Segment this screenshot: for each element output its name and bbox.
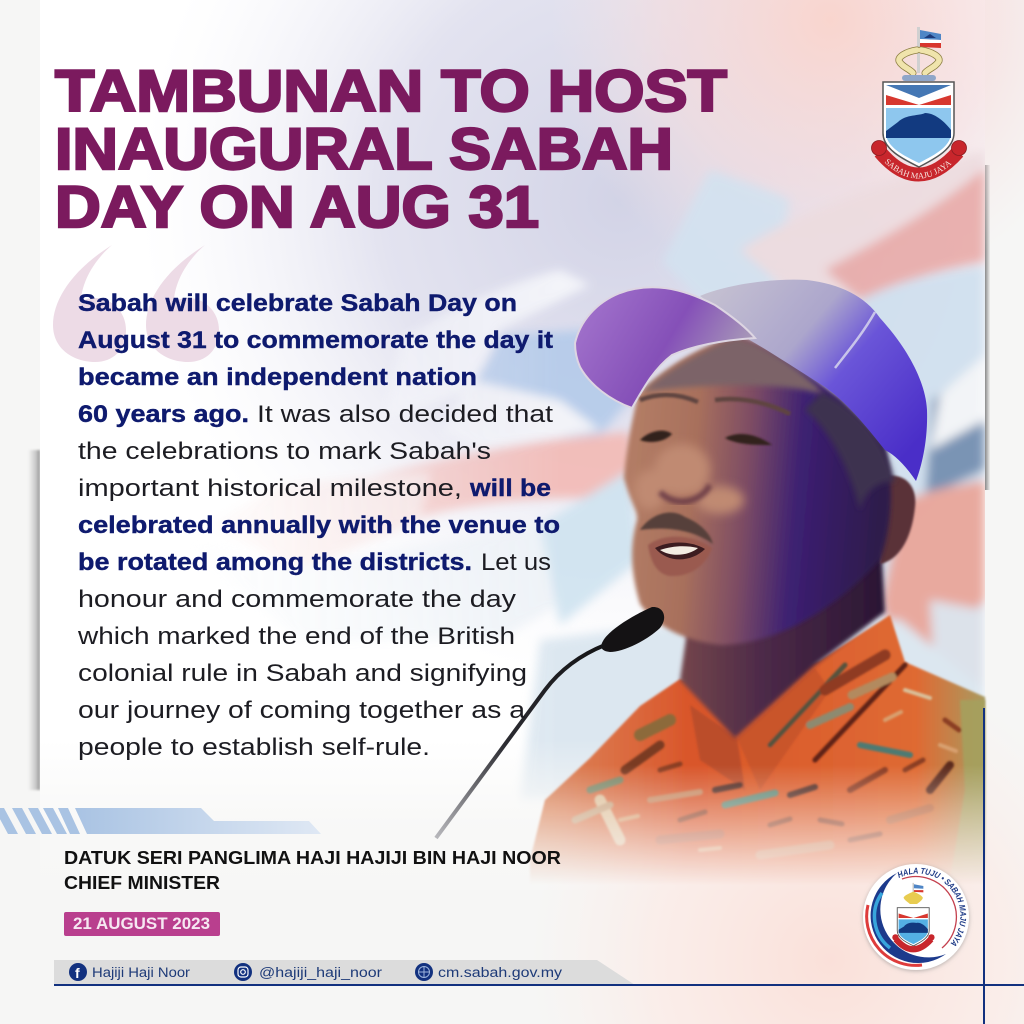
quote body text: Let us [481, 549, 551, 576]
panel shadow left [28, 450, 40, 790]
moustache [640, 513, 713, 544]
title: INAUGURAL SABAH [55, 117, 673, 182]
neck [680, 520, 885, 738]
eyebrows [640, 395, 790, 414]
quote body text: became an independent nation [78, 364, 477, 391]
motto ribbon [871, 140, 967, 182]
social media bar: Hajiji Haji Noor [92, 965, 191, 980]
lilac glow [40, 0, 985, 880]
speaker name and role: DATUK SERI PANGLIMA HAJI HAJIJI BIN HAJI NOOR [64, 847, 561, 868]
cap crown [700, 280, 927, 481]
quote body text: which marked the end of the British [77, 623, 515, 650]
frame lines [54, 708, 1024, 1024]
quote body text: It was also decided that [257, 401, 553, 428]
social media bar: @hajiji_haji_noor [259, 965, 383, 980]
gems [902, 75, 936, 81]
mouth opening [655, 542, 705, 559]
state crest: Sabah coat of arms [871, 27, 967, 182]
lower white fade [40, 740, 985, 890]
motto ribbon: SABAH MAJU JAYA [884, 159, 952, 179]
portrait: man speaking [436, 280, 985, 890]
cap visor [575, 287, 755, 408]
quote body text: 60 years ago. [78, 401, 249, 428]
quote body text: be rotated among the districts. [78, 549, 472, 576]
quote body text: August 31 to commemorate the day it [78, 327, 553, 354]
background panel [40, 0, 985, 880]
teeth [660, 546, 698, 555]
blurred flags backdrop [268, 154, 985, 797]
round badge: Hala Tuju: HALA TUJU • SABAH MAJU JAYA [898, 868, 966, 946]
nose and cheek highlights [634, 444, 744, 514]
quote body text: honour and commemorate the day [78, 586, 516, 613]
quote body text: the celebrations to mark Sabah's [78, 438, 491, 465]
date badge [64, 912, 220, 936]
ear [878, 476, 915, 564]
small crest [892, 883, 935, 949]
quote body text: colonial rule in Sabah and signifying [78, 660, 527, 687]
facebook icon [69, 963, 87, 981]
face [624, 335, 891, 645]
hair [805, 392, 895, 510]
speaker name and role: CHIEF MINISTER [64, 872, 220, 893]
quote marks [53, 245, 219, 362]
shield [883, 82, 954, 167]
panel shadow right [985, 165, 990, 490]
crescent cyan [874, 893, 890, 948]
speaker name and role [64, 847, 561, 893]
quote body text: people to establish self-rule. [78, 734, 430, 761]
bottom right pink glow [520, 680, 1024, 1024]
flag [917, 27, 941, 73]
social media bar [54, 960, 635, 985]
quote body text: important historical milestone, [78, 475, 462, 502]
quote body text: Sabah will celebrate Sabah Day on [78, 290, 517, 317]
forehead shade [642, 338, 825, 395]
crescent red [867, 905, 922, 965]
top right pink glow [540, 0, 1024, 320]
badge arc line [902, 877, 956, 948]
social media bar: cm.sabah.gov.my [438, 965, 562, 980]
quote body text: celebrated annually with the venue to [78, 512, 560, 539]
quote body text: will be [469, 475, 551, 502]
shirt [530, 615, 985, 890]
eyes [640, 431, 772, 445]
date badge: 21 AUGUST 2023 [73, 915, 210, 933]
raised arms [899, 50, 939, 73]
cap seam [835, 312, 875, 368]
instagram icon [234, 963, 252, 981]
microphone [436, 607, 664, 838]
quote body text: our journey of coming together as a [78, 697, 526, 724]
decorative stripes and bar [0, 808, 321, 834]
mouth [648, 537, 712, 576]
facebook icon: f [75, 965, 80, 981]
web icon [415, 963, 433, 981]
quote body text [77, 290, 560, 761]
crescent blue [871, 873, 946, 963]
title [55, 59, 727, 240]
nose [660, 485, 710, 502]
title: TAMBUNAN TO HOST [55, 59, 727, 124]
title: DAY ON AUG 31 [55, 175, 539, 240]
round badge: Hala Tuju [860, 862, 972, 974]
